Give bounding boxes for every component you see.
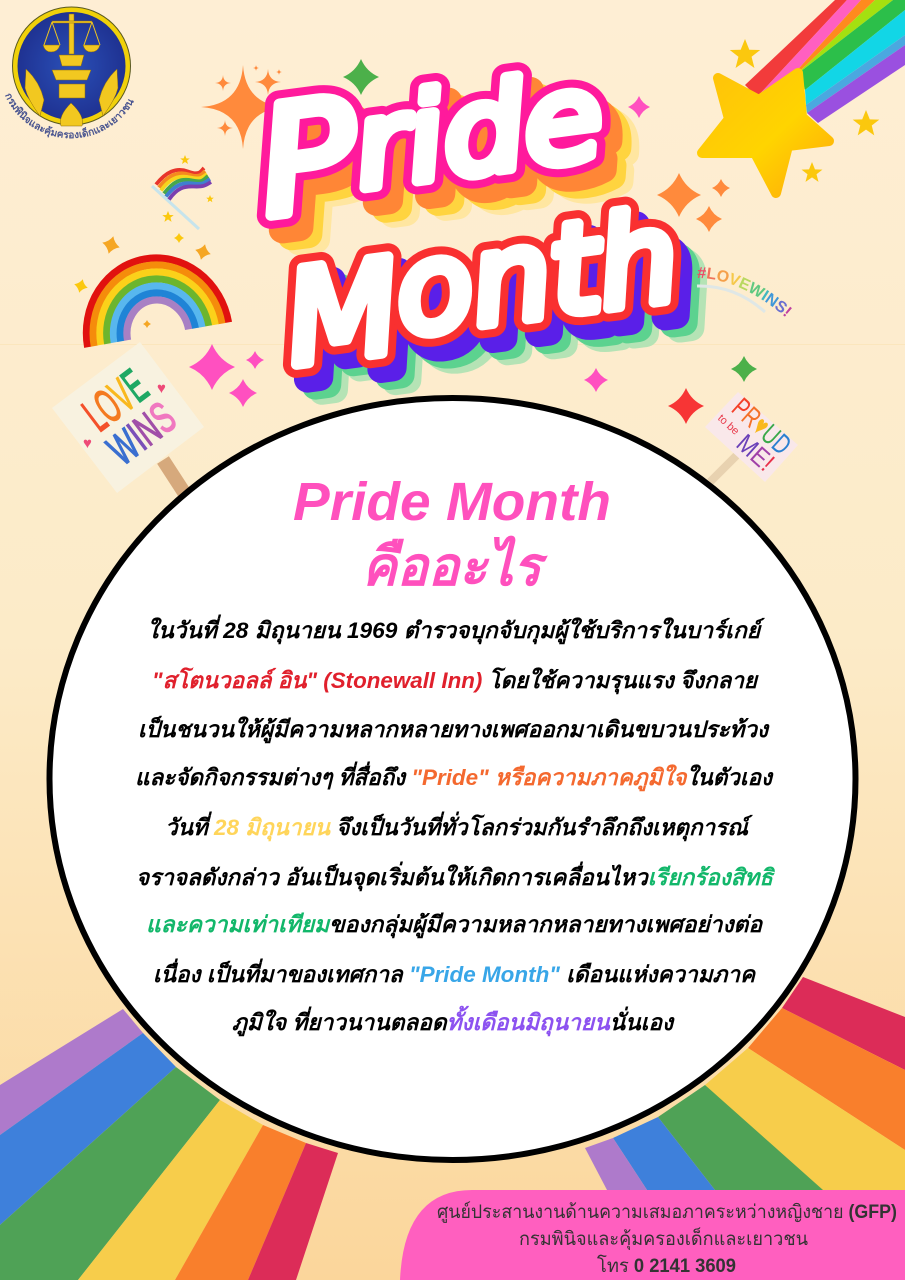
heading: what is: คืออะไร (362, 535, 549, 597)
body text: เป็นชนวนให้ผู้มีความหลากหลายทางเพศออกมาเดินขบวนประท้วง (138, 715, 770, 744)
department logo (5, 6, 134, 138)
panel: contact footer (400, 1190, 905, 1280)
body text: เนื่อง เป็นที่มาของเทศกาล "Pride Month" เดือนแห่งความภาค (153, 958, 757, 987)
title: Month: onth (398, 199, 698, 380)
body text: และจัดกิจกรรมต่างๆ ที่สื่อถึง "Pride" หรือความภาคภูมิใจในตัวเอง (135, 761, 774, 792)
title: Month: M (288, 245, 419, 410)
icon: rainbow flag (152, 168, 211, 229)
sign: proud to be me: PR♥UD (726, 392, 797, 460)
title: Pride: P (249, 66, 368, 252)
title: Month (276, 182, 714, 425)
rainbow rays: bottom left (0, 1009, 338, 1280)
heading: Pride Month: Pride Month (293, 472, 611, 532)
panel: contact footer: ศูนย์ประสานงานด้านความเสมอภาคระหว่างหญิงชาย (GFP) (437, 1201, 897, 1223)
title: Pride: ride (358, 61, 623, 232)
title: Pride: ride (367, 68, 632, 239)
title: Month: M (277, 230, 408, 396)
sign: love wins: LOVE (74, 360, 158, 442)
title: Pride: ride (346, 47, 611, 217)
body text (135, 614, 775, 1037)
title: Month: M (296, 252, 427, 417)
title: Month: onth (413, 211, 712, 392)
title: Month: M (303, 257, 434, 422)
icon: big gold star (702, 73, 829, 193)
sign: proud to be me: ME! (731, 428, 781, 477)
small gold stars (72, 39, 879, 328)
title: Month: onth (387, 184, 687, 365)
icon: rainbow arc (74, 247, 228, 347)
department logo: กรมพินิจและคุ้มครองเด็กและเยาวชน (5, 94, 134, 138)
panel: contact footer: กรมพินิจและคุ้มครองเด็กและเยาวชน (519, 1226, 808, 1251)
title: Month: onth (387, 184, 687, 365)
sign: proud to be me: to be (715, 412, 741, 438)
title: Pride: P (270, 88, 389, 273)
sign: love wins: ♥ (157, 380, 166, 397)
title: Pride: P (249, 66, 368, 252)
rainbow rays: bottom right (585, 977, 905, 1280)
title: Pride: ride (346, 47, 611, 217)
body text: ในวันที่ 28 มิถุนายน 1969 ตำรวจบุกจับกุมผู้ใช้บริการในบาร์เกย์ (147, 614, 765, 645)
body text: ภูมิใจ ที่ยาวนานตลอดทั้งเดือนมิถุนายนนั่นเอง (232, 1005, 675, 1037)
title: Month: onth (406, 206, 706, 387)
title: Month: M (277, 230, 408, 396)
body text: วันที่ 28 มิถุนายน จึงเป็นวันที่ทั่วโลกร่วมกันรำลึกถึงเหตุการณ์ (165, 811, 753, 842)
sign: love wins: WINS (99, 393, 185, 475)
panel: white circle (50, 398, 856, 1160)
title: Pride: ride (375, 73, 640, 244)
title: Pride: P (261, 81, 380, 266)
sign: love wins: ♥ (83, 435, 92, 452)
panel: contact footer: โทร 0 2141 3609 (597, 1254, 736, 1277)
tag: lovewins: #LOVEWINS! (697, 267, 792, 317)
body text: "สโตนวอลล์ อิน" (Stonewall Inn) โดยใช้ความรุนแรง จึงกลาย (152, 667, 759, 695)
shooting star rainbow trail (745, 0, 905, 123)
sign: proud to be me (705, 389, 798, 482)
body text: และความเท่าเทียมของกลุ่มผู้มีความหลากหลายทางเพศอย่างต่อ (146, 912, 763, 939)
title: Pride: P (278, 93, 397, 278)
sign: love wins (52, 342, 204, 497)
title: Pride (249, 31, 642, 281)
body text: จราจลดังกล่าว อันเป็นจุดเริ่มต้นให้เกิดการเคลื่อนไหวเรียกร้องสิทธิ (136, 861, 775, 892)
sparkles (189, 59, 757, 424)
